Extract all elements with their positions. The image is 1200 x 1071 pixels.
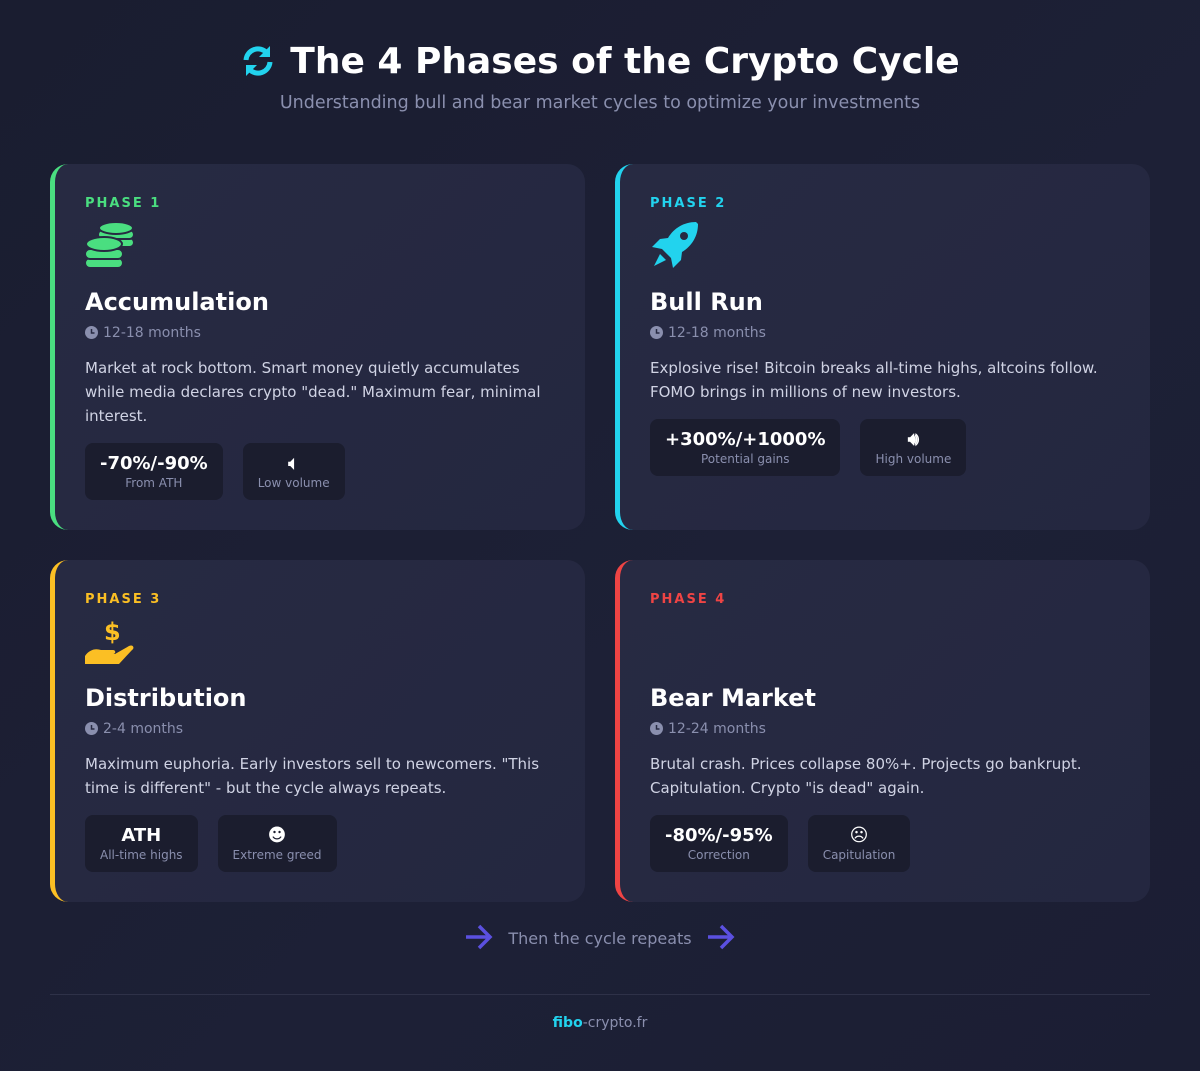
stats: 🔈︎	[288, 453, 299, 474]
description: Brutal crash. Prices collapse 80%+. Projects go bankrupt. Capitulation. Crypto "is dead" again.	[650, 755, 1081, 797]
duration: 12-18 months	[103, 325, 201, 341]
stats: From ATH	[125, 476, 182, 490]
phase label: PHASE 1	[85, 196, 161, 211]
stats: -80%/-95%	[665, 825, 773, 846]
stats: ATH	[121, 825, 161, 846]
panel: phase 1 accumulation	[50, 164, 585, 530]
panel: phase 2 bull run	[615, 164, 1150, 530]
duration: 12-24 months	[668, 721, 766, 737]
stats	[650, 419, 966, 476]
heading: Bull Run	[650, 288, 763, 316]
stats: 🔊︎	[908, 429, 919, 450]
duration: 2-4 months	[103, 721, 183, 737]
description: Explosive rise! Bitcoin breaks all-time highs, altcoins follow. FOMO brings in millions of new investors.	[650, 359, 1098, 401]
stats: Extreme greed	[233, 848, 322, 862]
icon: rocket	[652, 222, 698, 268]
stats: Correction	[688, 848, 750, 862]
phase label: PHASE 4	[650, 592, 726, 607]
panel: phase 4 bear market	[615, 560, 1150, 902]
stats	[85, 815, 337, 872]
heading: Bear Market	[650, 684, 816, 712]
panel: phase 3 distribution	[50, 560, 585, 902]
phase label: PHASE 2	[650, 196, 726, 211]
icon: coins	[86, 223, 133, 267]
description: Market at rock bottom. Smart money quietly accumulates while media declares crypto "dead." Maximum fear, minimal interest.	[85, 359, 541, 425]
stats: -70%/-90%	[100, 453, 208, 474]
stats: ☹	[850, 825, 868, 846]
cycle repeats arrow text	[466, 924, 734, 950]
stats	[85, 443, 345, 500]
stats: Low volume	[258, 476, 330, 490]
heading: Accumulation	[85, 288, 269, 316]
stats: +300%/+1000%	[665, 429, 825, 450]
stats	[650, 815, 910, 872]
icon: hand with dollar: $	[104, 618, 121, 646]
heading: Distribution	[85, 684, 247, 712]
icon: hand with dollar	[85, 618, 134, 664]
stats: ☻	[268, 825, 286, 846]
subtitle: Understanding bull and bear market cycles to optimize your investments	[280, 93, 920, 113]
cycle repeats arrow text: Then the cycle repeats	[508, 929, 692, 948]
stats: Capitulation	[823, 848, 895, 862]
stats: Potential gains	[701, 452, 790, 466]
phase label: PHASE 3	[85, 592, 161, 607]
description: Maximum euphoria. Early investors sell to newcomers. "This time is different" - but the cycle always repeats.	[85, 755, 539, 797]
duration: 12-18 months	[668, 325, 766, 341]
footer: fibo-crypto.fr	[553, 1015, 647, 1031]
stats: All-time highs	[100, 848, 183, 862]
stats: High volume	[875, 452, 951, 466]
title: The 4 Phases of the Crypto Cycle	[290, 41, 960, 82]
